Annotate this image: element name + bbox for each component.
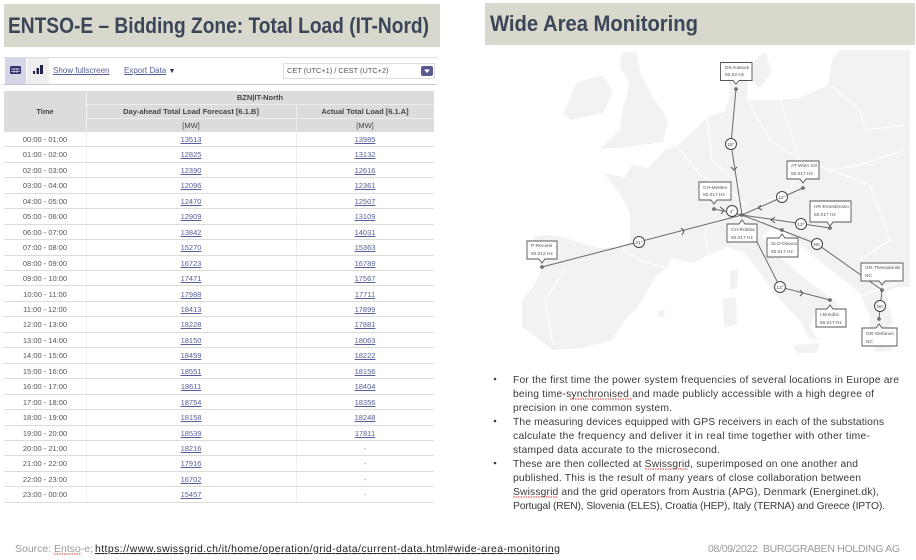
table rows: 12909 (181, 212, 201, 221)
table header: Time (36, 107, 54, 116)
table rows: 18248 (355, 413, 375, 422)
table rows: 18413 (181, 305, 201, 314)
Scandinavia fragment (750, 52, 772, 88)
icon: chart view (27, 58, 49, 84)
table rows: 18228 (181, 320, 201, 329)
link: show fullscreen: Show fullscreen (53, 66, 109, 75)
table header: Day-ahead Total Load Forecast [6.1.B] (123, 107, 259, 116)
Great Britain (600, 52, 668, 149)
callout labels: 50.012 Hz (531, 251, 553, 257)
callout labels: 50.017 Hz (814, 212, 836, 218)
callout labels: AT-Wien SO (791, 163, 818, 169)
angle badge labels (635, 142, 884, 310)
bullet 3: published. This is the result of many years of close collaboration between (513, 473, 861, 484)
bullet 1: being time-synchronised and made publicly accessible with a high degree of (513, 389, 874, 400)
table rows: 12096 (181, 181, 201, 190)
table rows: 17899 (355, 305, 375, 314)
table rows: 20:00 - 21:00 (23, 444, 67, 453)
callout labels: 50.017 Hz (791, 171, 813, 177)
table rows: 22:00 - 23:00 (23, 475, 67, 484)
angle badge labels: 15° (727, 142, 735, 148)
bullet 3: These are then collected at Swissgrid, superimposed on one another and (513, 459, 858, 470)
table rows: 18539 (181, 429, 201, 438)
table rows: 10:00 - 11:00 (23, 290, 67, 298)
table header (4, 91, 434, 132)
callout labels: CH-Robbia (731, 227, 755, 233)
Corsica and Sardinia (723, 270, 738, 327)
table rows: - (364, 475, 366, 484)
icon: table view (5, 58, 26, 84)
callout labels: 50.017 Hz (820, 320, 842, 326)
toolbar: table view controls (3, 57, 437, 85)
callout labels: NC (865, 273, 872, 279)
table rows: 17811 (355, 429, 375, 438)
column dividers (86, 132, 87, 503)
table rows: 18551 (181, 367, 201, 376)
flow arrows (681, 167, 803, 296)
table rows: 02:00 - 03:00 (23, 166, 67, 175)
angle badge labels: 12° (778, 195, 786, 201)
bullet 3 (494, 459, 885, 512)
connection lines (542, 89, 882, 319)
callout labels: 50.02 Hz (725, 72, 745, 78)
table rows: 17:00 - 18:00 (23, 398, 67, 407)
bullet 3: Swissgrid and the grid operators from Austria (APG), Denmark (Energinet.dk), (513, 487, 879, 498)
table rows: 18:00 - 19:00 (23, 413, 67, 422)
dropdown: time zone (283, 63, 435, 79)
footer: source: Source: Entso-e; (15, 543, 93, 555)
callouts (527, 62, 903, 346)
table rows: 18222 (355, 351, 375, 360)
table rows: 13513 (181, 135, 201, 144)
table rows: 15270 (181, 243, 201, 252)
link: export data: Export Data ▼ (124, 66, 175, 75)
table rows: 12825 (181, 150, 201, 159)
table rows: 07:00 - 08:00 (23, 243, 67, 252)
table rows: 12390 (181, 166, 201, 175)
table rows: 16:00 - 17:00 (23, 382, 67, 391)
table rows: 08:00 - 09:00 (23, 259, 67, 268)
table rows: 16789 (355, 259, 375, 268)
angle badge labels: 13° (797, 222, 805, 228)
table rows: 05:00 - 06:00 (23, 212, 67, 221)
table rows: 03:00 - 04:00 (23, 181, 67, 190)
callout labels: P-Recarei (531, 243, 552, 249)
table rows: 18156 (355, 367, 375, 376)
table rows: 13109 (355, 212, 375, 221)
table rows: - (364, 490, 366, 499)
table rows: 11:00 - 12:00 (23, 305, 67, 314)
table rows: 18158 (181, 413, 201, 422)
Sicily (793, 343, 820, 353)
callout labels: SLO-Divaca (771, 241, 797, 247)
table header: [MW] (182, 121, 200, 130)
table rows: 12470 (181, 197, 201, 206)
table rows: 18063 (355, 336, 375, 345)
callout labels: NC (866, 339, 873, 345)
table rows: 13985 (355, 135, 375, 144)
table rows: 06:00 - 07:00 (23, 228, 67, 237)
callout labels: DK-Kassoe (725, 65, 750, 71)
angle badge labels: 21° (635, 240, 643, 246)
table rows: 17567 (355, 274, 375, 283)
table rows: 17988 (181, 290, 201, 298)
table rows: 17711 (355, 290, 375, 298)
dropdown: time zone: CET (UTC+1) / CEST (UTC+2) (287, 66, 389, 75)
table rows: 19:00 - 20:00 (23, 429, 67, 438)
heading: Wide Area Monitoring: Wide Area Monitoring (490, 11, 698, 36)
table rows: 18611 (181, 382, 201, 391)
table rows (4, 135, 434, 503)
table rows: 15363 (355, 243, 375, 252)
callout labels: GR-Stefanos (866, 331, 894, 337)
bullet 3: Portugal (REN), Slovenia (ELES), Croatia (HEP), Italy (TERNA) and Greece (IPTO). (513, 501, 885, 512)
table rows: 18150 (181, 336, 201, 345)
callout labels: 50.017 Hz (731, 235, 753, 241)
table rows: 13842 (181, 228, 201, 237)
table rows: 17916 (181, 459, 201, 468)
table rows: 21:00 - 22:00 (23, 459, 67, 468)
bullet 2: calculate the frequency and deliver it in real time together with other time- (513, 431, 870, 442)
table rows: 16702 (181, 475, 201, 484)
table rows: 18754 (181, 398, 201, 407)
footer: date and company: 08/09/2022 BURGGRABEN HOLDING AG (708, 543, 900, 555)
table rows: 12507 (355, 197, 375, 206)
bullet 1: For the first time the power system frequencies of several locations in Europe are (513, 375, 899, 386)
table rows: 01:00 - 02:00 (23, 150, 67, 159)
table rows: 00:00 - 01:00 (23, 135, 67, 144)
angle badge labels: 13° (776, 285, 784, 291)
table rows: 16723 (181, 259, 201, 268)
table rows: - (364, 444, 366, 453)
angle badge labels: 4° (730, 209, 734, 215)
bullet 2: The measuring devices equipped with GPS receivers in each of the substations (513, 417, 884, 428)
callout labels: 50.017 Hz (703, 192, 725, 198)
table rows: 18459 (181, 351, 201, 360)
bullet 2 (494, 417, 884, 456)
table rows: 12:00 - 13:00 (23, 320, 67, 329)
table rows: 09:00 - 10:00 (23, 274, 67, 283)
callout labels: GR-Thessaloniki (865, 265, 900, 271)
table rows: 12616 (355, 166, 375, 175)
table rows: 14:00 - 15:00 (23, 351, 67, 360)
angle badge labels: NC (877, 304, 884, 310)
table rows: 18356 (355, 398, 375, 407)
angle badge labels: NC (814, 242, 821, 248)
table rows: 13132 (355, 150, 375, 159)
bullet 2: stamped data accurate to the microsecond. (513, 445, 720, 456)
table rows: 23:00 - 00:00 (23, 490, 67, 499)
table rows: - (364, 459, 366, 468)
angle badges (634, 138, 886, 312)
heading: ENTSO-E bidding zone total load (4, 4, 440, 47)
table header: Actual Total Load [6.1.A] (321, 107, 409, 116)
heading: Wide Area Monitoring (485, 3, 915, 45)
table rows: 18216 (181, 444, 201, 453)
callout labels: HR-Ernestinowo (814, 204, 849, 210)
callout labels: I-Brindisi (820, 312, 839, 318)
table rows: 04:00 - 05:00 (23, 197, 67, 206)
Ireland (563, 75, 613, 120)
table rows: 15:00 - 16:00 (23, 367, 67, 376)
table rows: 12361 (355, 181, 375, 190)
callout labels (531, 65, 900, 345)
table rows: 15457 (181, 490, 201, 499)
nodes (540, 88, 884, 320)
table rows: 13:00 - 14:00 (23, 336, 67, 345)
bullet 1 (494, 375, 899, 414)
callout labels: CH-Mettlen (703, 185, 728, 191)
callout labels: 50.017 Hz (771, 249, 793, 255)
continental Europe (522, 50, 910, 352)
Balearic Islands (657, 310, 665, 317)
table rows: 18404 (355, 382, 375, 391)
table header: [MW] (356, 121, 374, 130)
bullet 1: precision in one common system. (513, 403, 672, 414)
table rows: 17881 (355, 320, 375, 329)
table: total load by hour (4, 91, 434, 503)
footer: source: https://www.swissgrid.ch/it/home/operation/grid-data/current-data.html#wide-area-monitoring (95, 543, 560, 555)
table rows: 14031 (355, 228, 375, 237)
table header: BZN|IT-North (237, 93, 283, 102)
table rows: 17471 (181, 274, 201, 283)
